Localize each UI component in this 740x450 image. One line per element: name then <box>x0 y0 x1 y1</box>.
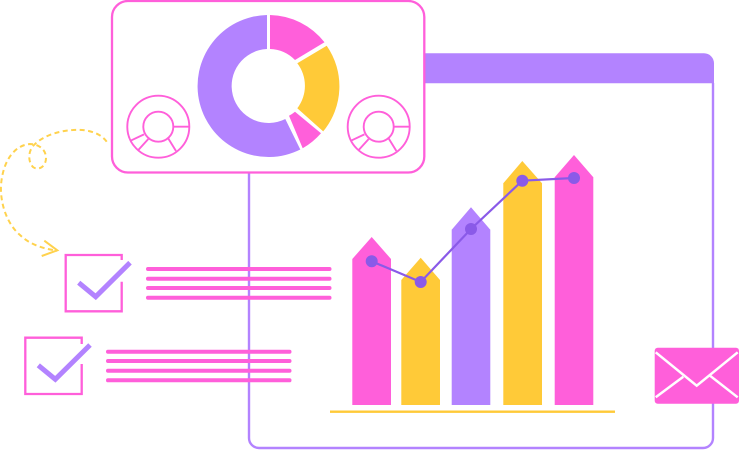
trend line with points <box>366 172 580 288</box>
icon: envelope <box>655 348 739 404</box>
small donut outline left <box>127 96 189 158</box>
dashed curved arrow <box>1 130 107 256</box>
checklist item two <box>25 338 290 394</box>
check mark two <box>38 345 90 379</box>
arrow bar 1 <box>352 237 391 405</box>
text placeholder lines one <box>148 269 330 298</box>
arrow bar 4 <box>503 161 542 405</box>
large donut chart <box>198 15 339 157</box>
check mark one <box>79 263 130 297</box>
chart baseline <box>330 410 615 413</box>
checkbox one <box>66 255 122 311</box>
arrow bar 5 <box>555 155 593 405</box>
bar chart <box>330 155 615 413</box>
arrow bar 2 <box>401 258 440 405</box>
browser window frame <box>249 53 714 448</box>
checklist item one <box>66 255 329 311</box>
checkbox two <box>25 338 82 394</box>
window title bar <box>424 53 714 83</box>
text placeholder lines two <box>108 352 290 380</box>
dashboard panel <box>112 1 424 172</box>
arrow bar 3 <box>452 207 490 405</box>
small donut outline right <box>348 96 410 158</box>
